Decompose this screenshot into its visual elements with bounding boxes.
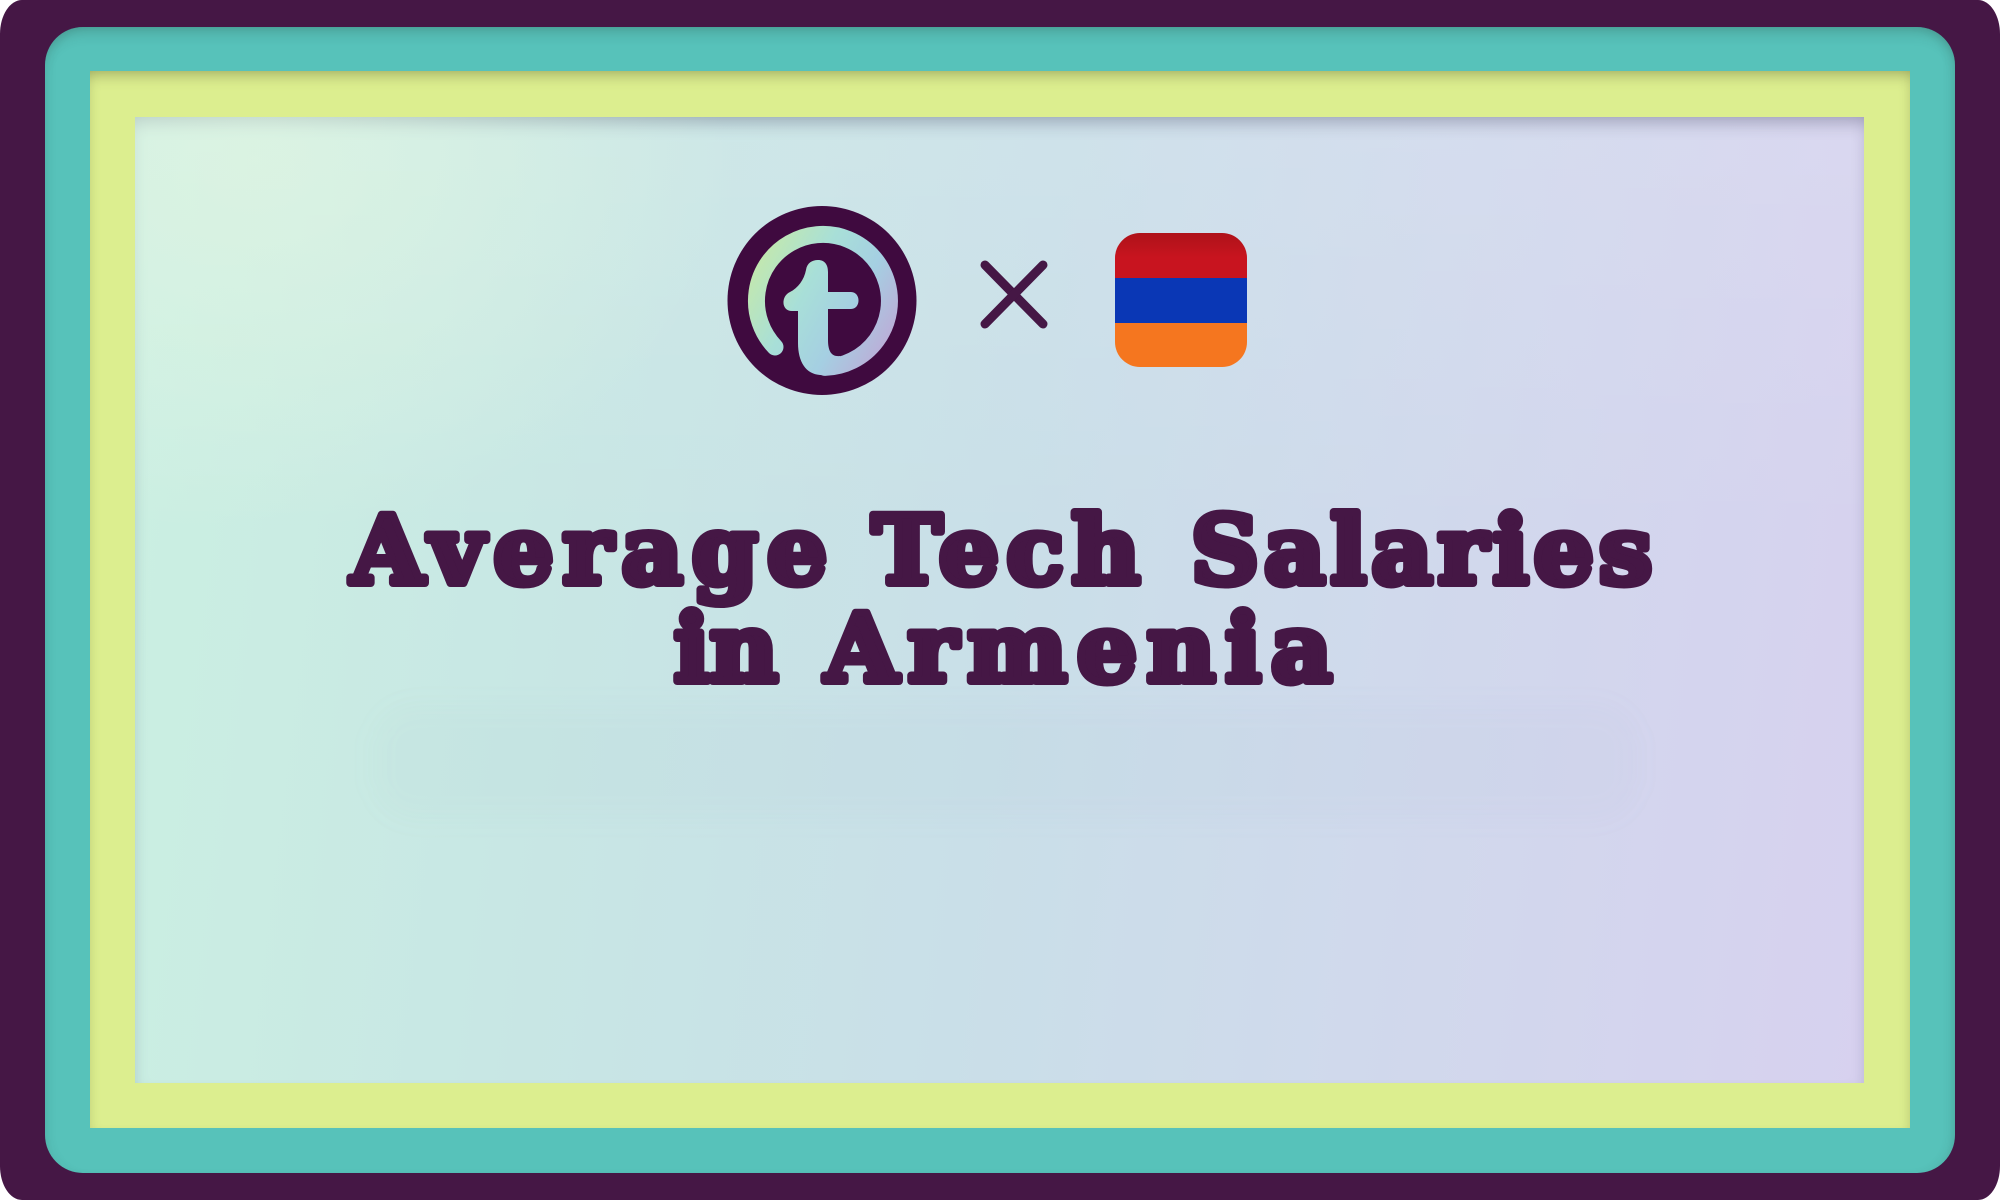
icon: multiply sign: [985, 265, 1043, 324]
title: Tech: [872, 496, 1140, 606]
panel: gradient background: [135, 117, 1864, 1083]
title: Average: [350, 496, 827, 606]
title: Armenia: [824, 594, 1332, 704]
title: Salaries: [1191, 496, 1652, 606]
title: [350, 496, 1652, 704]
title: in: [674, 594, 778, 704]
icon: brand logo: [728, 206, 916, 395]
icon: Armenian flag: [1115, 233, 1247, 367]
